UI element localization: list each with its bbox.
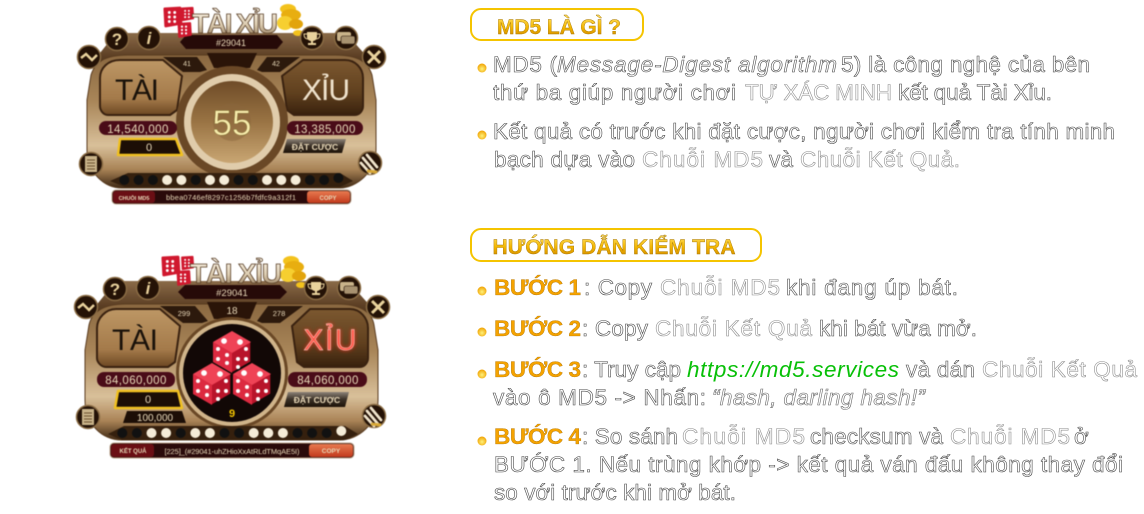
game body frame: [87, 55, 376, 188]
heading: hướng dẫn kiểm tra: [471, 229, 761, 261]
step 1: [478, 275, 958, 300]
text block: what is MD5: thứ ba giúp người chơi: [493, 80, 736, 105]
dice circle: 9: [229, 408, 235, 420]
game body frame: [85, 304, 378, 440]
step 1: khi đang úp bát.: [786, 275, 958, 300]
total pill left: 84,060,000: [105, 375, 167, 387]
step 2: Chuỗi Kết Quả: [655, 316, 812, 341]
step 2: BƯỚC 2: [494, 316, 581, 341]
top band frame: [94, 281, 372, 330]
icon buttons: ?: [112, 30, 122, 49]
step 3: vào ô MD5 -> Nhấn:: [493, 385, 706, 410]
center timer circle: 55: [213, 104, 251, 143]
MD5 string bar: [112, 190, 351, 204]
text block: what is MD5: MD5 (: [493, 52, 558, 77]
total pill right: 13,385,000: [294, 124, 356, 136]
ID pill: #29041: [216, 288, 248, 299]
bet input: 0: [145, 394, 151, 406]
step 1: BƯỚC 1: [494, 275, 581, 300]
text block: what is MD5: bạch dựa vào: [494, 147, 635, 172]
text block: what is MD5: 5) là công nghệ của bên: [841, 52, 1090, 77]
text block: what is MD5: Kết quả có trước khi đặt cược, người chơi kiểm tra tính minh: [493, 119, 1115, 144]
left count tab: 41: [183, 61, 191, 68]
MD5 string bar: COPY: [319, 196, 337, 202]
text block: what is MD5: kết quả Tài Xỉu.: [898, 80, 1052, 105]
TÀI button: [100, 60, 182, 115]
step 4: [478, 424, 1123, 505]
step 1: Chuỗi MD5: [660, 275, 780, 300]
top band frame: [96, 33, 368, 80]
text block: what is MD5: Chuỗi Kết Quả.: [800, 147, 960, 172]
heading: MD5 là gì: [471, 9, 643, 40]
step 1: : Copy: [584, 275, 653, 300]
left count tab: 299: [178, 309, 190, 318]
center top tab: [207, 302, 257, 319]
bet button: [283, 139, 346, 153]
TÀI button: [97, 309, 180, 367]
center top tab: [207, 53, 257, 68]
total pill right: [288, 372, 367, 387]
step 4: checksum và: [810, 424, 943, 449]
text block: what is MD5: Message-Digest algorithm: [557, 52, 837, 77]
bet button: [284, 392, 349, 407]
text block: what is MD5: [478, 52, 1115, 172]
link: https://md5.services: [687, 357, 899, 382]
dice circle: [176, 317, 288, 429]
panel: game screenshot MD5: [78, 4, 386, 204]
right count tab: [257, 57, 300, 72]
text block: what is MD5: Chuỗi MD5: [642, 147, 763, 172]
bet button: ĐẶT CƯỢC: [292, 142, 338, 152]
ID pill: [180, 35, 283, 49]
bet amount: [123, 411, 186, 424]
left count tab: [160, 306, 208, 323]
icon buttons: [78, 26, 386, 176]
step 4: ở: [1074, 424, 1089, 449]
right count tab: 42: [272, 61, 280, 68]
logo TÀI XỈU: [165, 4, 303, 39]
panel: game screenshot result: [74, 256, 390, 458]
total pill right: 84,060,000: [297, 375, 359, 387]
step 3: Chuỗi Kết Quả: [982, 357, 1137, 382]
logo TÀI XỈU: TÀI XỈU: [192, 7, 278, 39]
text block: what is MD5: và: [769, 147, 793, 172]
dice: [193, 331, 271, 405]
icon buttons: i: [146, 279, 152, 298]
XỈU button: XỈU: [302, 73, 350, 107]
XỈU button highlighted: [292, 309, 368, 367]
result string bar: [225]_(#29041-uhZHioXxAtRLdTMqAE5I): [164, 447, 300, 456]
step 2: [478, 316, 977, 341]
icon buttons: ?: [110, 280, 120, 299]
TÀI button: TÀI: [115, 74, 159, 107]
step 2: khi bát vừa mở.: [819, 316, 977, 341]
icon buttons: i: [147, 29, 153, 48]
result dots strip: [108, 426, 358, 440]
logo TÀI XỈU: TÀI XỈU: [190, 257, 282, 289]
bet input: [118, 139, 182, 155]
bet input: 0: [146, 142, 152, 154]
right count tab: [257, 306, 303, 323]
total pill right: [287, 121, 363, 136]
center timer circle: [176, 66, 288, 178]
result dots strip: [110, 173, 353, 187]
ID pill: [178, 285, 287, 299]
result string bar: COPY: [322, 448, 341, 455]
step 3: và dán: [906, 357, 975, 382]
step 3: : Truy cập: [582, 357, 681, 382]
bet button: ĐẶT CƯỢC: [294, 395, 340, 405]
bet amount: 100,000: [137, 413, 174, 424]
result string bar: [110, 443, 354, 458]
XỈU button highlighted: XỈU: [304, 323, 356, 357]
MD5 string bar: bbea0746ef8297c1256b7fdfc9a312f1: [166, 193, 296, 202]
total pill left: 14,540,000: [107, 124, 169, 136]
MD5 string bar: CHUỖI MD5: [119, 195, 149, 202]
heading: hướng dẫn kiểm tra: HƯỚNG DẪN KIỂM TRA: [492, 235, 736, 259]
total pill left: [97, 372, 175, 387]
step 3: “hash, darling hash!”: [712, 385, 926, 410]
step 4: BƯỚC 1. Nếu trùng khớp -> kết quả ván đấu không thay đổi: [494, 452, 1123, 477]
step 4: Chuỗi MD5: [950, 424, 1070, 449]
step 3: BƯỚC 3: [494, 357, 581, 382]
TÀI button: TÀI: [112, 324, 158, 357]
logo TÀI XỈU: [163, 256, 306, 289]
heading: MD5 là gì: MD5 LÀ GÌ ?: [497, 16, 621, 39]
result string bar: KẾT QUẢ: [120, 448, 147, 455]
ID pill: #29041: [216, 38, 246, 48]
text block: what is MD5: TỰ XÁC MINH: [745, 80, 892, 105]
right count tab: 278: [273, 309, 285, 318]
bet input: [115, 391, 182, 408]
XỈU button highlighted: XỈU: [304, 323, 356, 357]
total pill left: [99, 121, 177, 136]
step 4: BƯỚC 4: [494, 424, 581, 449]
XỈU button: [282, 60, 363, 115]
center top tab: 18: [226, 306, 238, 317]
left count tab: [163, 57, 207, 72]
icon buttons: [74, 276, 390, 428]
step 4: : So sánh: [582, 424, 678, 449]
step 3: [478, 357, 1137, 410]
step 4: Chuỗi MD5: [682, 424, 805, 449]
step 4: so với trước khi mở bát.: [494, 480, 736, 505]
step 2: : Copy: [582, 316, 649, 341]
